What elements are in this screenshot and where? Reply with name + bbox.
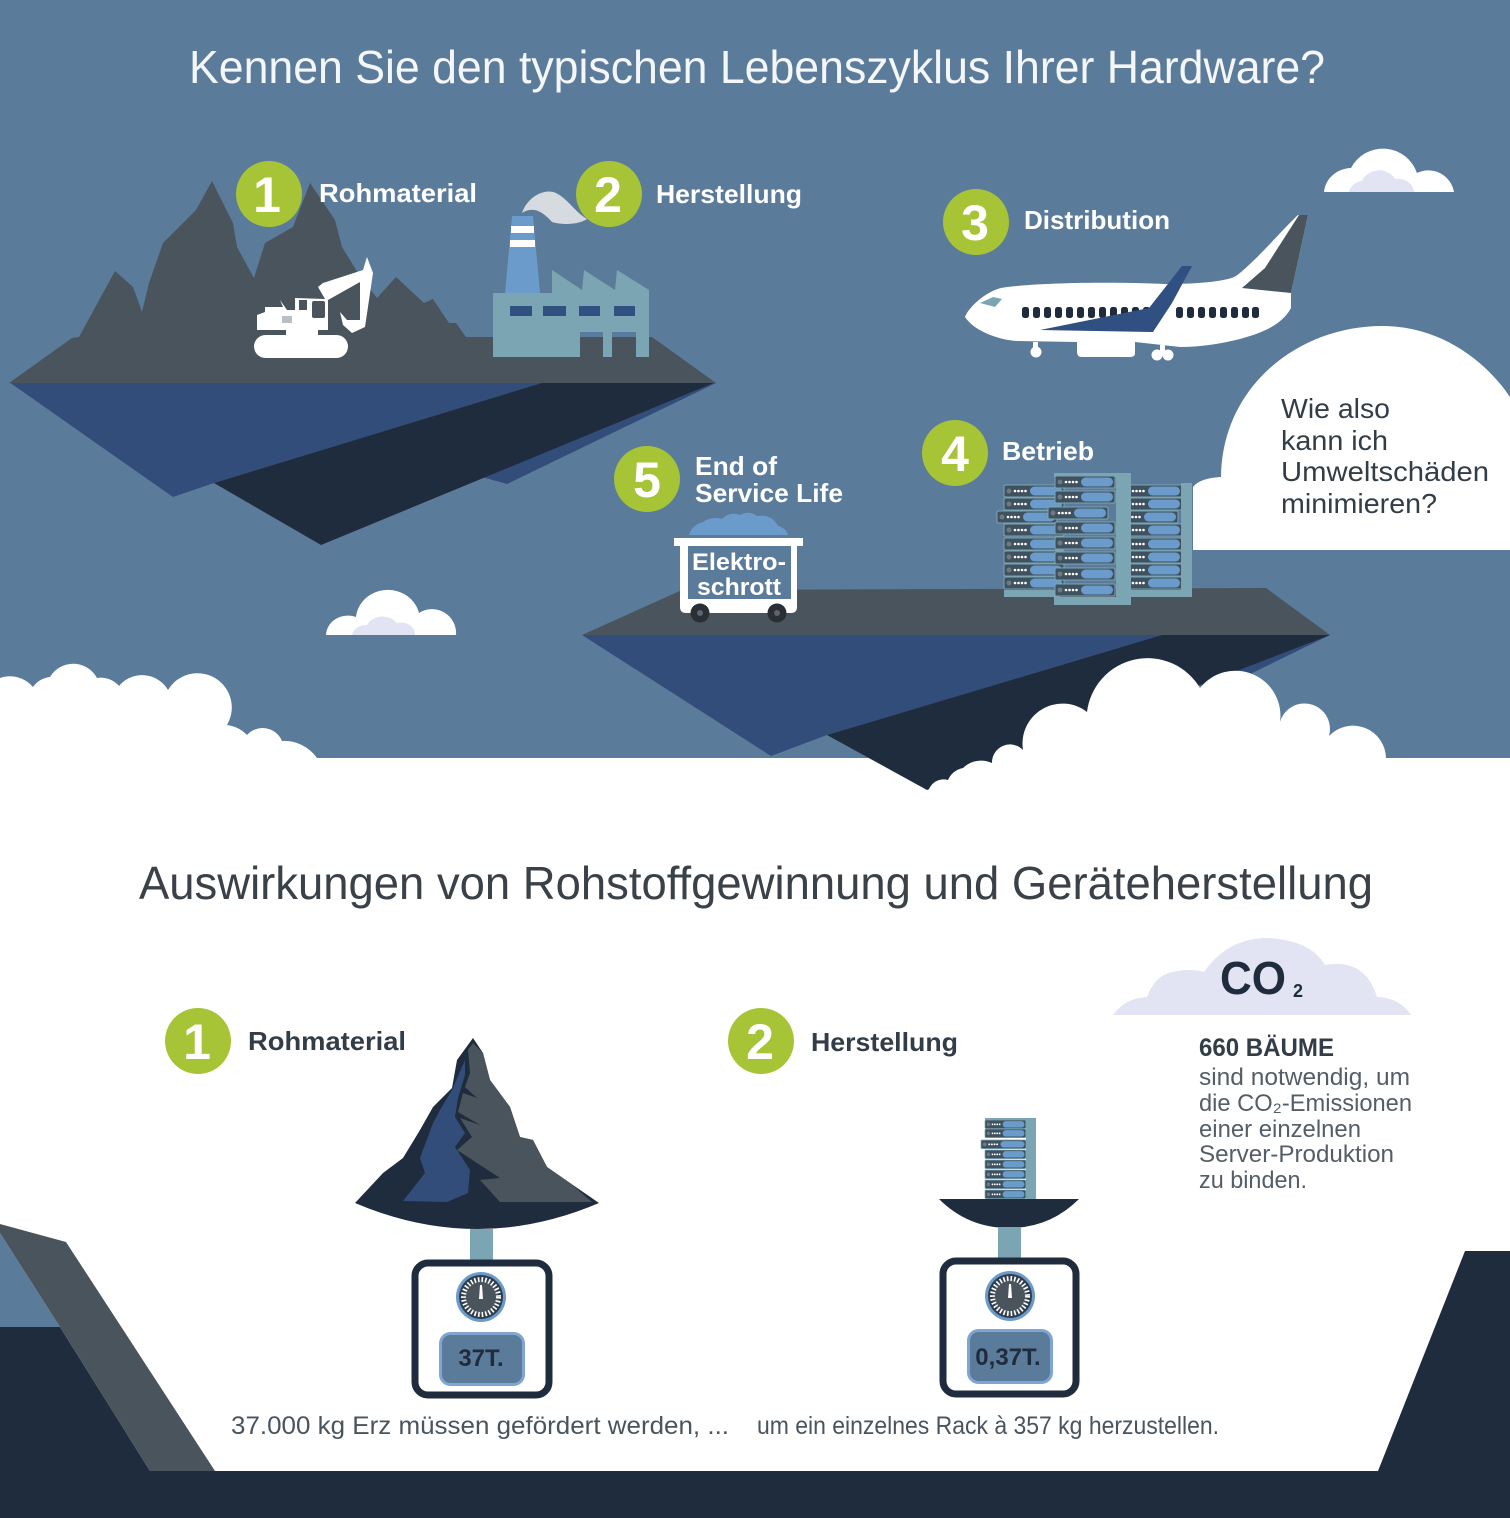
mountain range	[9, 181, 716, 383]
step 1 badge and label: 1	[253, 167, 281, 223]
lower step 1 badge and label: 1	[183, 1014, 211, 1070]
icon: excavator	[254, 257, 373, 358]
right rack	[1118, 483, 1192, 597]
airplane windows	[1022, 307, 1259, 318]
center rack	[1048, 473, 1131, 605]
lower step 1 badge and label: Rohmaterial	[248, 1026, 406, 1056]
scale: 0.37 tonnes	[943, 1227, 1076, 1394]
heading: section two: Auswirkungen von Rohstoffgewinnung und Geräteherstellung	[139, 857, 1373, 909]
icon: rack on scale pan	[939, 1118, 1079, 1228]
step 4 badge and label: Betrieb	[1002, 436, 1094, 466]
step 4 badge and label: 4	[941, 426, 969, 482]
panel: floating island with mountains and factory	[9, 181, 716, 545]
caption: ore: 37.000 kg Erz müssen gefördert werden, ...	[231, 1412, 729, 1440]
CO2 cloud: 2	[1293, 981, 1303, 1001]
display: 37T.	[458, 1345, 504, 1372]
icon: server racks	[997, 473, 1192, 605]
CO2 cloud: CO	[1220, 952, 1286, 1004]
icon: mountain on scale pan	[355, 1038, 599, 1229]
lower step 2 badge and label: 2	[746, 1014, 774, 1070]
step 5 badge and label: Service Life	[695, 478, 843, 508]
bottom frame	[0, 1224, 1510, 1518]
callout cloud: question	[1193, 326, 1510, 550]
cloud bank: lower left	[0, 664, 317, 758]
icon: airplane	[965, 215, 1308, 360]
panel: second floating island	[582, 588, 1330, 790]
callout cloud: question: Umweltschäden	[1281, 456, 1489, 487]
text block: trees: einer einzelnen	[1199, 1116, 1361, 1143]
lower step 2 badge and label: Herstellung	[811, 1027, 958, 1057]
text block: trees: zu binden.	[1199, 1167, 1307, 1194]
text block: trees: sind notwendig, um	[1199, 1064, 1410, 1091]
cloud: small middle	[326, 590, 456, 635]
gauge	[985, 1271, 1035, 1321]
title: Kennen Sie den typischen Lebenszyklus Ihrer Hardware?	[189, 41, 1325, 93]
cloud bank: lower right	[928, 658, 1386, 800]
step 5 badge and label	[614, 446, 843, 512]
step 5 badge and label: 5	[633, 452, 661, 508]
display: 0,37T.	[975, 1344, 1041, 1371]
lower step 1 badge and label	[165, 1008, 406, 1074]
sky background	[0, 0, 1510, 758]
step 2 badge and label: 2	[594, 167, 622, 223]
icon: factory	[493, 192, 649, 357]
step 1 badge and label	[236, 161, 477, 227]
step 3 badge and label: Distribution	[1024, 205, 1170, 235]
scale: 37 tonnes	[415, 1229, 549, 1395]
display	[968, 1330, 1052, 1382]
icon: e-waste cart: Elektro-	[692, 549, 786, 576]
callout cloud: question: kann ich	[1281, 425, 1388, 456]
callout cloud: question: minimieren?	[1281, 488, 1437, 519]
gauge	[456, 1272, 506, 1322]
left rack	[997, 485, 1064, 597]
CO2 cloud	[1113, 938, 1411, 1015]
step 3 badge and label	[943, 189, 1170, 255]
text block: trees: die CO₂-Emissionen	[1199, 1090, 1412, 1117]
text block: trees	[1199, 1034, 1412, 1194]
display	[440, 1334, 524, 1384]
step 2 badge and label	[576, 161, 802, 227]
step 2 badge and label: Herstellung	[656, 179, 802, 209]
text block: trees: Server-Produktion	[1199, 1141, 1394, 1168]
lower step 2 badge and label	[728, 1008, 958, 1074]
step 5 badge and label: End of	[695, 451, 777, 481]
cloud: top right	[1324, 149, 1454, 192]
text block: trees: 660 BÄUME	[1199, 1034, 1334, 1062]
step 3 badge and label: 3	[961, 195, 989, 251]
icon: e-waste cart: schrott	[697, 574, 781, 601]
icon: e-waste cart	[674, 513, 803, 622]
callout cloud: question: Wie also	[1281, 393, 1390, 424]
step 1 badge and label: Rohmaterial	[319, 178, 477, 208]
step 4 badge and label	[922, 420, 1094, 486]
island underside	[9, 382, 716, 545]
caption: rack: um ein einzelnes Rack à 357 kg herzustellen.	[757, 1412, 1219, 1440]
